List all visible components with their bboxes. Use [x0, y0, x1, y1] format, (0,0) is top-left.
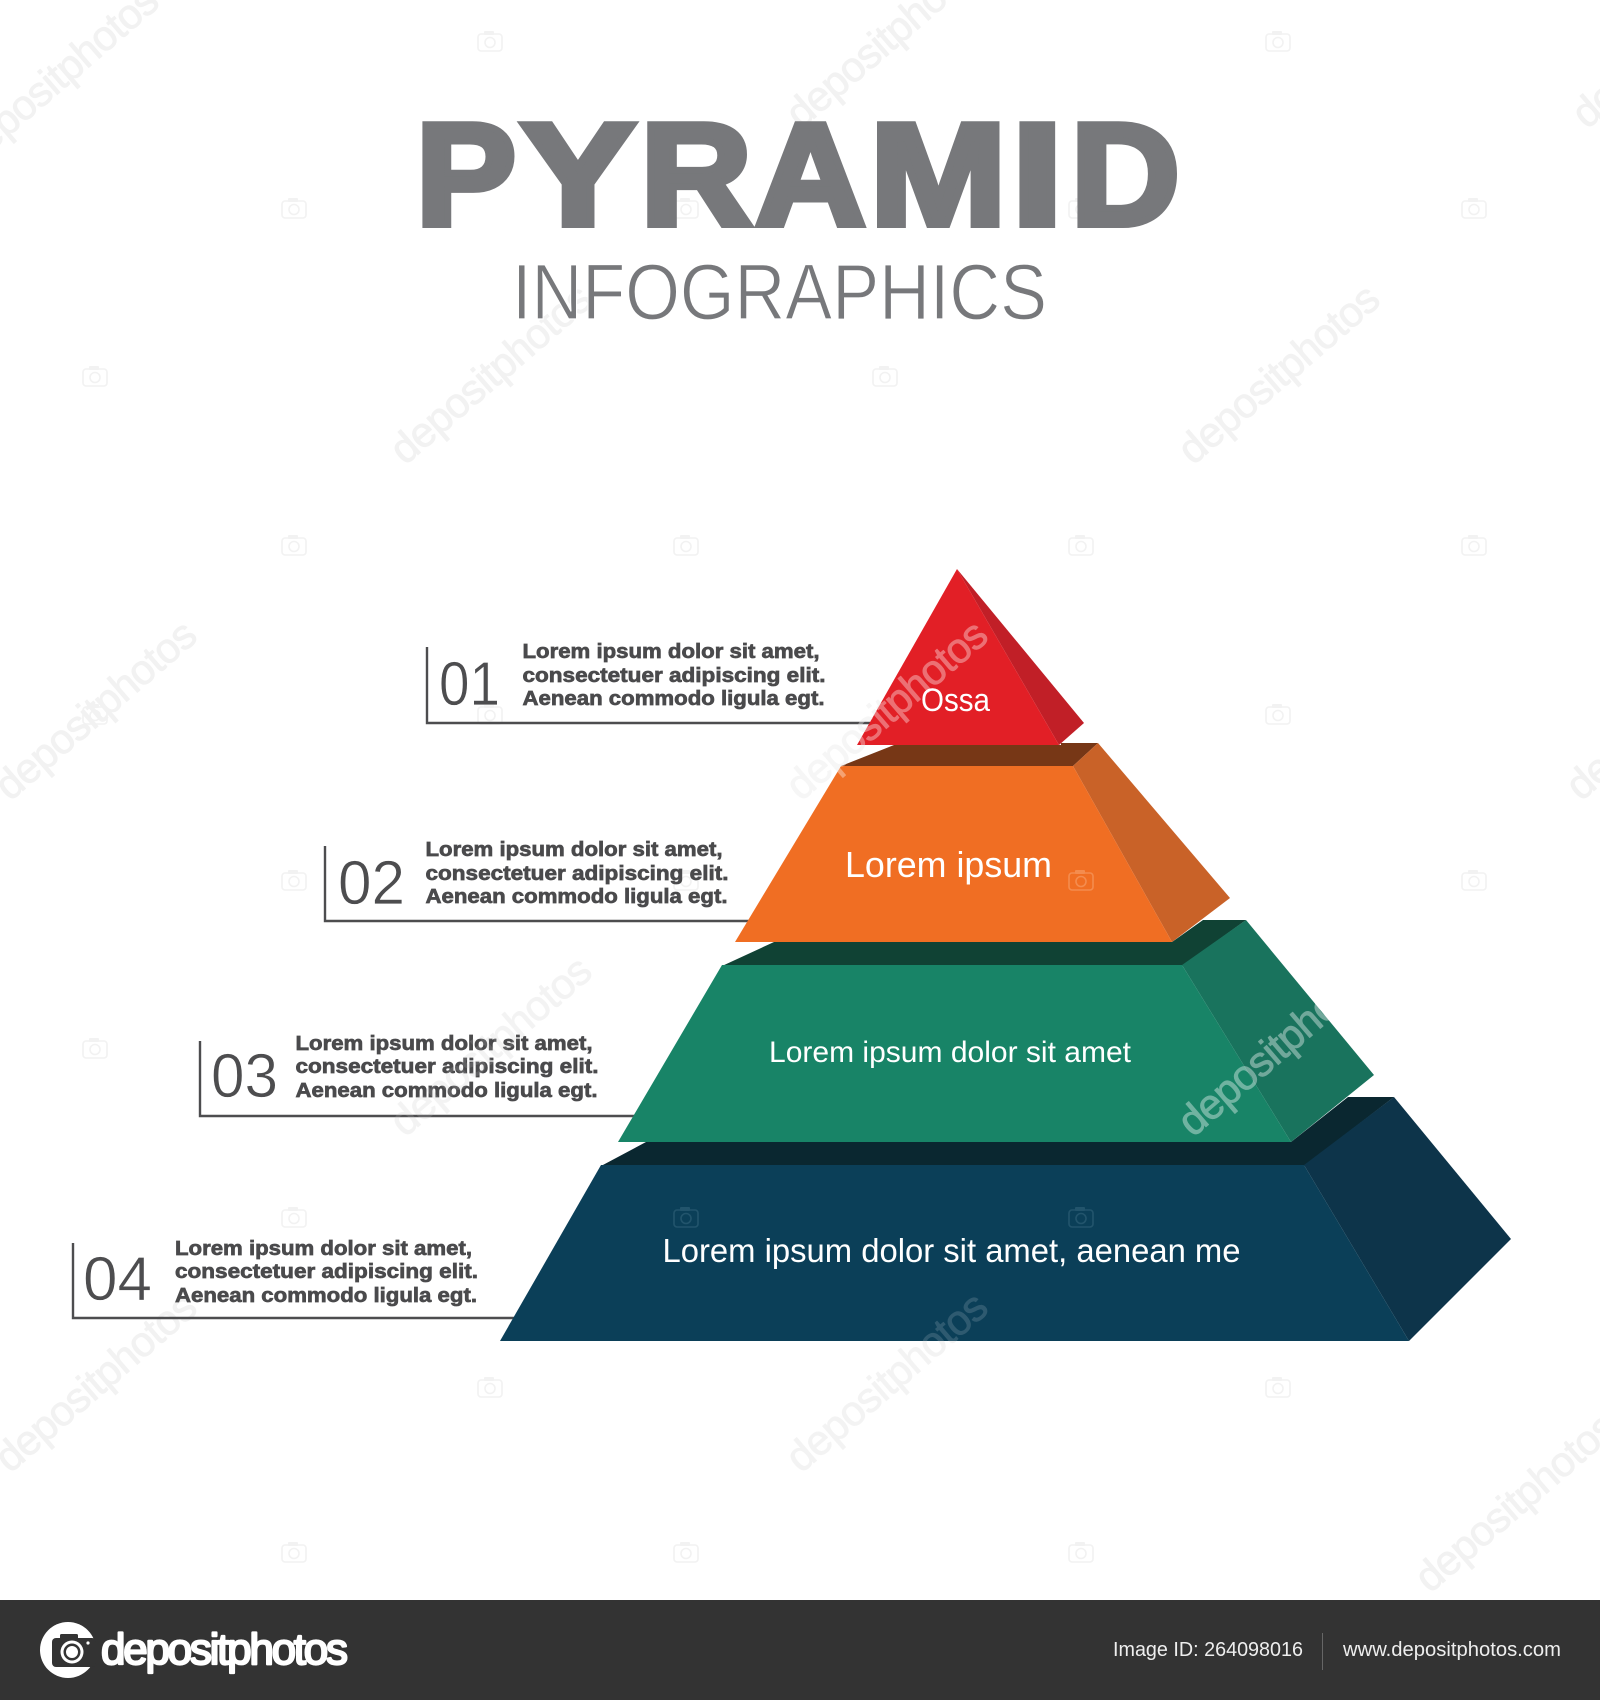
subtitle: INFOGRAPHICS	[512, 247, 1047, 336]
title: D	[1071, 94, 1180, 256]
callout 01: 01	[439, 650, 500, 719]
callout 01: consectetuer adipiscing elit.	[522, 665, 826, 687]
website url: www.depositphotos.com	[1342, 1639, 1561, 1661]
callout 02: Lorem ipsum dolor sit amet,	[426, 839, 722, 861]
title: Y	[521, 94, 635, 256]
watermark over pyramid	[380, 610, 1388, 1481]
callout 03: Lorem ipsum dolor sit amet,	[296, 1033, 592, 1055]
pyramid tier 2: orange	[735, 743, 1230, 942]
pyramid tier 1: red	[857, 569, 1084, 745]
callout 01	[427, 641, 870, 723]
callout 02: Aenean commodo ligula egt.	[426, 886, 728, 908]
title: A	[756, 94, 866, 256]
logo icon: camera	[40, 1622, 96, 1678]
title: I	[1012, 94, 1063, 256]
pyramid tier 4: navy	[500, 1097, 1511, 1341]
pyramid tier 1: red: Ossa	[921, 682, 990, 718]
footer bar	[0, 1600, 1600, 1700]
callout 02: consectetuer adipiscing elit.	[426, 863, 728, 885]
image id: Image ID: 264098016	[1113, 1639, 1303, 1661]
callout 03	[200, 1033, 635, 1116]
callout 02	[325, 839, 750, 921]
pyramid tier 2: orange: Lorem ipsum	[845, 844, 1052, 885]
title: P	[416, 94, 516, 256]
callout 04: Lorem ipsum dolor sit amet,	[175, 1238, 472, 1260]
title: M	[870, 94, 1006, 256]
pyramid tier 4: navy: Lorem ipsum dolor sit amet, aenean me	[662, 1232, 1240, 1269]
callout 04: Aenean commodo ligula egt.	[175, 1285, 477, 1307]
logo wordmark: depositphotos	[101, 1625, 348, 1674]
callout 02: 02	[338, 849, 405, 918]
callout 04: consectetuer adipiscing elit.	[175, 1261, 478, 1283]
callout 03: 03	[211, 1042, 278, 1111]
callout 03: Aenean commodo ligula egt.	[296, 1080, 598, 1102]
callout 03: consectetuer adipiscing elit.	[296, 1056, 598, 1078]
pyramid tier 3: green: Lorem ipsum dolor sit amet	[769, 1036, 1132, 1069]
footer divider	[1322, 1633, 1323, 1670]
callout 04: 04	[83, 1245, 152, 1314]
callout 01: Aenean commodo ligula egt.	[522, 688, 824, 710]
title: R	[641, 94, 752, 256]
callout 01: Lorem ipsum dolor sit amet,	[522, 641, 820, 663]
pyramid tier 3: green	[618, 920, 1374, 1142]
callout 04	[73, 1238, 516, 1318]
